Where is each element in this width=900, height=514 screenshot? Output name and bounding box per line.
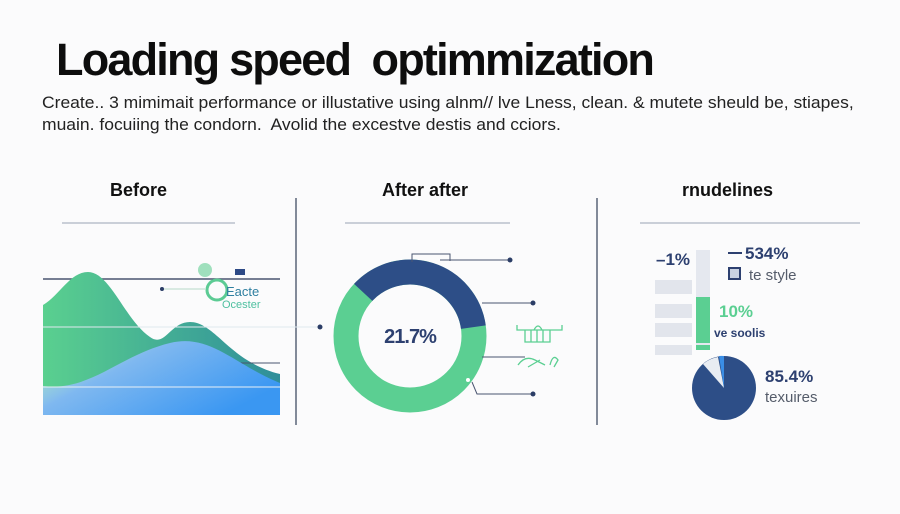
bar chart: mudelines: –1% [656,250,690,269]
icons: outline [517,325,562,367]
icon: globe label: Eacte [226,284,259,299]
subtitle text: Create.. 3 mimimait performance or illustative using alnm// lve Lness, clean. & mutete sheuld be, stiapes, [42,94,854,112]
heading: mudelines: rnudelines [682,180,773,200]
dividers [62,222,235,224]
bar chart: mudelines: te style [749,267,797,284]
heading: before: Before [110,180,167,200]
icon: globe label: Ocester [222,299,261,311]
area chart: before [43,263,322,415]
bar chart: mudelines: ve soolis [714,326,766,340]
pie chart: texuires [765,389,818,406]
bar chart: mudelines: 534% [745,244,788,263]
title: Loading speed optimmization [56,34,653,85]
pie chart [692,356,818,420]
pie chart: 85.4% [765,367,813,386]
bar chart: mudelines: 10% [719,302,753,321]
callout lines [412,254,510,262]
donut chart [346,254,562,400]
subtitle text [42,94,854,134]
subtitle text: muain. focuiing the condorn. Avolid the excestve destis and cciors. [42,116,561,134]
heading: after: After after [382,180,468,200]
icon: globe label [160,263,261,311]
donut chart: 21.7% [384,326,437,348]
bar chart: mudelines [655,244,797,355]
